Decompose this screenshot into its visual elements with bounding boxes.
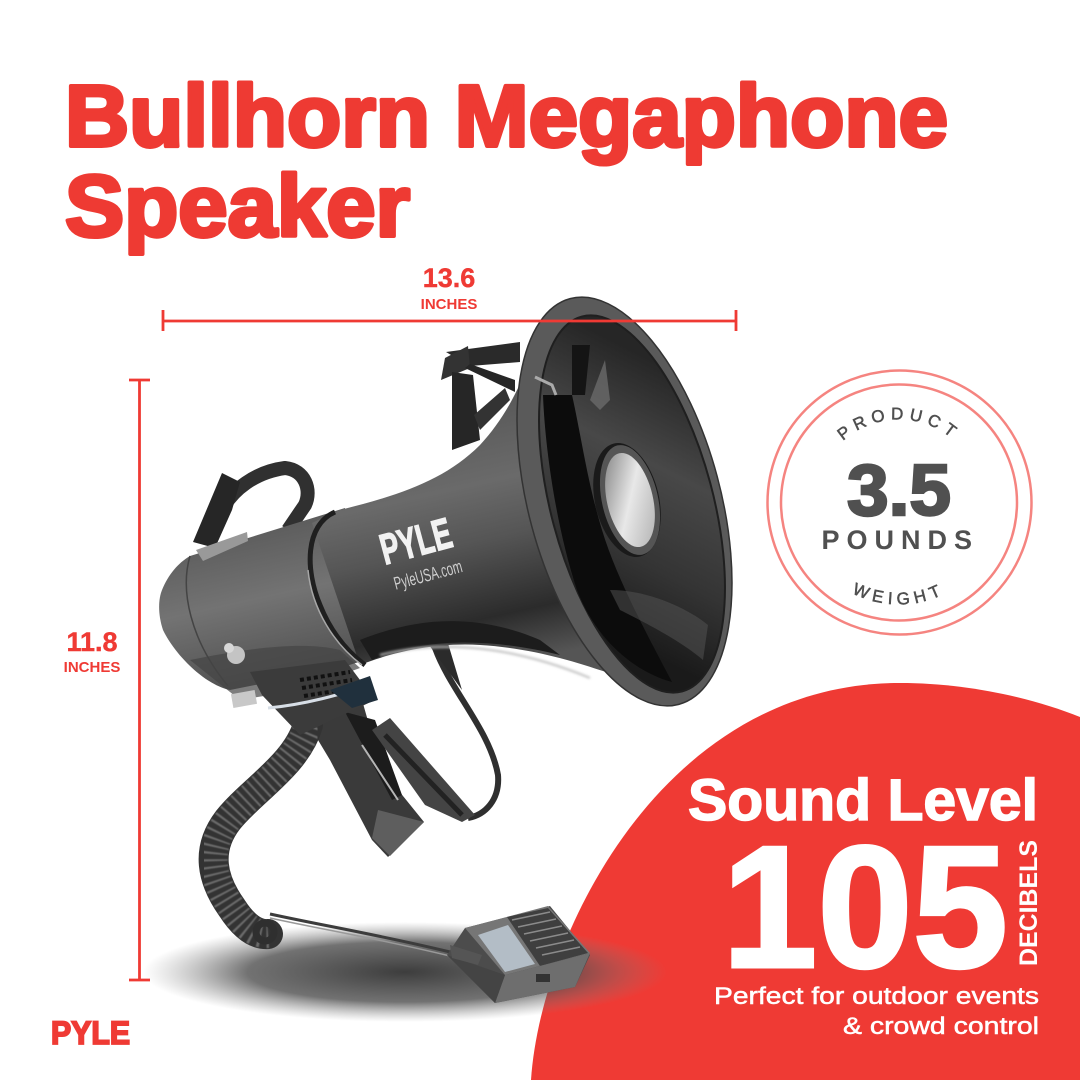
coiled microphone cord xyxy=(214,725,450,956)
body lower mechanism xyxy=(224,643,378,735)
brand on body: PYLE xyxy=(375,509,457,574)
dimension: height: 11.8 xyxy=(66,627,118,657)
sound level heading: Sound Level xyxy=(688,768,1038,833)
flared bell body xyxy=(312,345,606,672)
brand on body xyxy=(375,509,464,595)
body seam band xyxy=(310,512,365,665)
dimension: height xyxy=(64,380,150,980)
horn driver with lamp xyxy=(583,436,671,564)
hand microphone box xyxy=(447,906,590,1003)
rear clip xyxy=(196,532,248,561)
inner dark horn throat xyxy=(543,395,672,682)
sound level caption xyxy=(714,983,1039,1040)
badge value: 3.5 xyxy=(847,451,951,531)
sound level caption: & crowd control xyxy=(843,1013,1039,1040)
badge: product weight xyxy=(766,369,1033,636)
dimension: width: INCHES xyxy=(421,296,477,313)
badge arc text: product: PRODUCT xyxy=(836,408,958,440)
gloss highlights xyxy=(360,621,560,660)
red corner panel: sound level background xyxy=(531,683,1080,1080)
dimension: width xyxy=(163,263,736,331)
badge unit: POUNDS xyxy=(822,525,976,555)
bell opening xyxy=(477,274,772,729)
megaphone product illustration xyxy=(159,274,772,1003)
floor shadow xyxy=(143,922,667,1022)
rear strap loop xyxy=(193,468,308,548)
dimension: width: 13.6 xyxy=(423,263,475,293)
trigger handle xyxy=(300,700,475,857)
title: Speaker xyxy=(65,158,410,255)
title xyxy=(65,68,948,255)
lower strap loop xyxy=(435,648,498,818)
badge arc text: weight: WEIGHT xyxy=(854,582,938,605)
title: Bullhorn Megaphone xyxy=(65,68,948,165)
sound level caption: Perfect for outdoor events xyxy=(714,983,1039,1010)
brand logo: PYLE xyxy=(51,1015,130,1051)
cap seam xyxy=(186,556,228,686)
tube body xyxy=(159,508,365,690)
sound level value: 105 xyxy=(722,809,1008,1004)
brand on body: PyleUSA.com xyxy=(392,556,464,594)
decibels unit: DECIBELS xyxy=(1015,840,1043,966)
top strap at bell xyxy=(441,342,520,450)
dimension: height: INCHES xyxy=(64,659,120,676)
